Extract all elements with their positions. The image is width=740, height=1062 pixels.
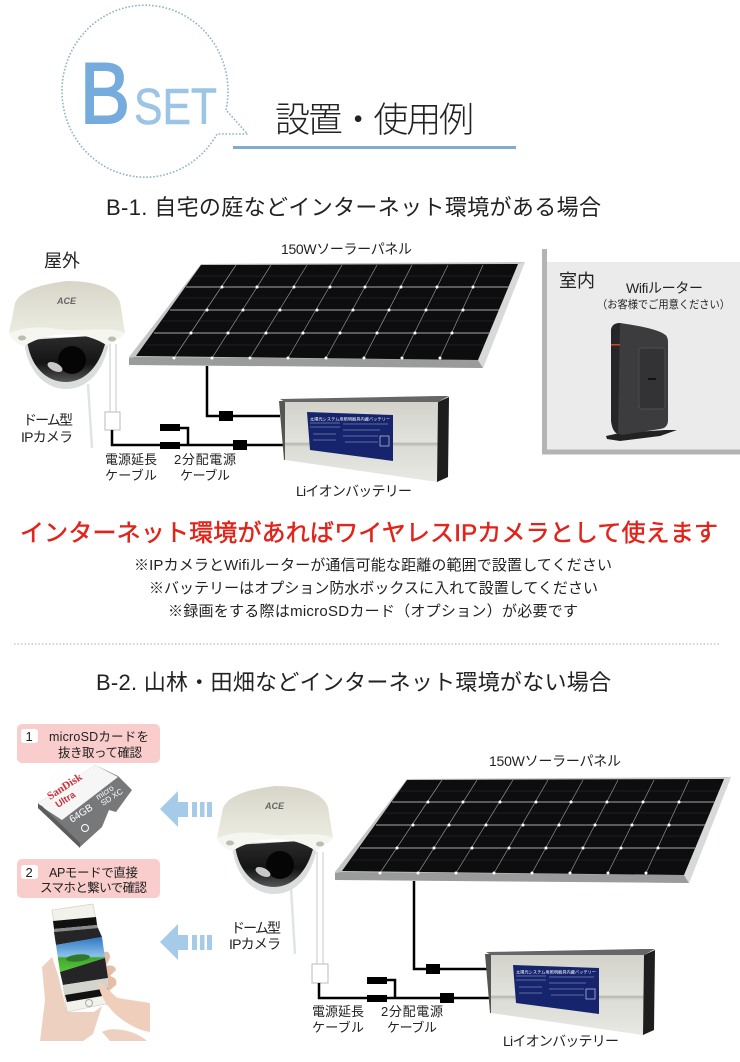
arrow: to SD card <box>160 791 212 827</box>
callout: step 2 <box>17 859 160 898</box>
dome IP camera: ACE <box>264 801 285 811</box>
icon: microSD card <box>38 765 132 848</box>
label: solar panel: 150Wソーラーパネル <box>489 753 621 769</box>
badge: B SET speech bubble <box>62 5 247 177</box>
label: extension cable: 電源延長 <box>105 452 157 467</box>
antenna <box>88 384 92 448</box>
note 3: ※録画をする際はmicroSDカード（オプション）が必要です <box>168 603 578 620</box>
Li-ion battery <box>485 949 655 1035</box>
solar panel <box>335 777 731 883</box>
heading: B-2: B-2. 山林・田畑などインターネット環境がない場合 <box>96 670 611 695</box>
note 2: ※バッテリーはオプション防水ボックスに入れて設置してください <box>149 580 598 597</box>
callout: step 1 <box>17 724 160 763</box>
badge: B SET speech bubble: SET <box>134 78 217 135</box>
label: extension cable line 2: ケーブル <box>312 1020 364 1035</box>
label: battery: Liイオンバッテリー <box>503 1033 619 1049</box>
Li-ion battery <box>279 396 449 482</box>
label: battery: Liイオンバッテリー <box>296 483 412 499</box>
label: splitter cable: 2分配電源 <box>381 1004 443 1019</box>
antenna <box>291 888 295 954</box>
icon: wifi router <box>606 323 677 441</box>
callout: step 2: 2 <box>26 865 33 880</box>
label: camera line 2: IPカメラ <box>21 429 73 445</box>
cable junction box <box>312 964 328 983</box>
icon: microSD card: SanDisk <box>45 771 85 803</box>
label: outdoor: 屋外 <box>44 251 80 271</box>
icon: microSD card: 64GB <box>68 802 95 826</box>
label: router note: （お客様でご用意ください） <box>597 297 730 311</box>
label: extension cable line 2: ケーブル <box>105 468 157 483</box>
arrow: to smartphone <box>160 924 212 960</box>
Li-ion battery: 太陽光システム用照明器具内蔵バッテリー <box>516 968 596 976</box>
icon: microSD card: Ultra <box>54 789 78 811</box>
title underline <box>233 146 516 149</box>
Li-ion battery: 太陽光システム用照明器具内蔵バッテリー <box>310 416 390 422</box>
callout: step 1: microSDカードを <box>49 730 149 744</box>
solar panel <box>129 262 525 368</box>
callout: step 1: 1 <box>26 729 33 744</box>
wiring <box>112 366 283 450</box>
icon: microSD card: micro <box>94 783 116 802</box>
dome IP camera: ACE <box>56 296 77 306</box>
dome IP camera <box>9 281 125 389</box>
wiring <box>319 881 490 1003</box>
diagram: B-2 system <box>217 753 731 1049</box>
label: solar panel: 150Wソーラーパネル <box>281 241 412 257</box>
label: indoor: 室内 <box>559 271 595 291</box>
label: camera: ドーム型 <box>23 412 73 428</box>
note 1: ※IPカメラとWifiルーターが通信可能な距離の範囲で設置してください <box>134 556 612 574</box>
callout: step 2: APモードで直接 <box>49 865 138 880</box>
label: camera line 2: IPカメラ <box>229 936 281 952</box>
callout: red headline: インターネット環境があればワイヤレスIPカメラとして使えます <box>20 520 718 547</box>
panel: indoor <box>544 249 740 452</box>
label: splitter cable line 2: ケーブル <box>387 1020 437 1035</box>
title: 設置・使用例 <box>275 101 474 140</box>
cable junction box <box>105 412 120 430</box>
icon: smartphone in hand <box>40 904 150 1041</box>
label: extension cable: 電源延長 <box>312 1004 364 1019</box>
label: splitter cable line 2: ケーブル <box>180 468 230 483</box>
label: router: Wifiルーター <box>626 280 703 296</box>
label: camera: ドーム型 <box>231 920 281 936</box>
power cable from camera <box>110 344 116 412</box>
dome IP camera <box>217 786 333 894</box>
icon: microSD card: SD XC <box>99 787 125 808</box>
power cable from camera <box>317 852 323 964</box>
heading: B-1: B-1. 自宅の庭などインターネット環境がある場合 <box>106 195 601 220</box>
label: splitter cable: 2分配電源 <box>174 452 236 467</box>
diagram: B-1 outdoor system <box>9 241 525 499</box>
badge: B SET speech bubble: B <box>80 46 130 142</box>
callout: step 2: スマホと繋いで確認 <box>40 880 147 895</box>
callout: step 1: 抜き取って確認 <box>58 745 142 760</box>
